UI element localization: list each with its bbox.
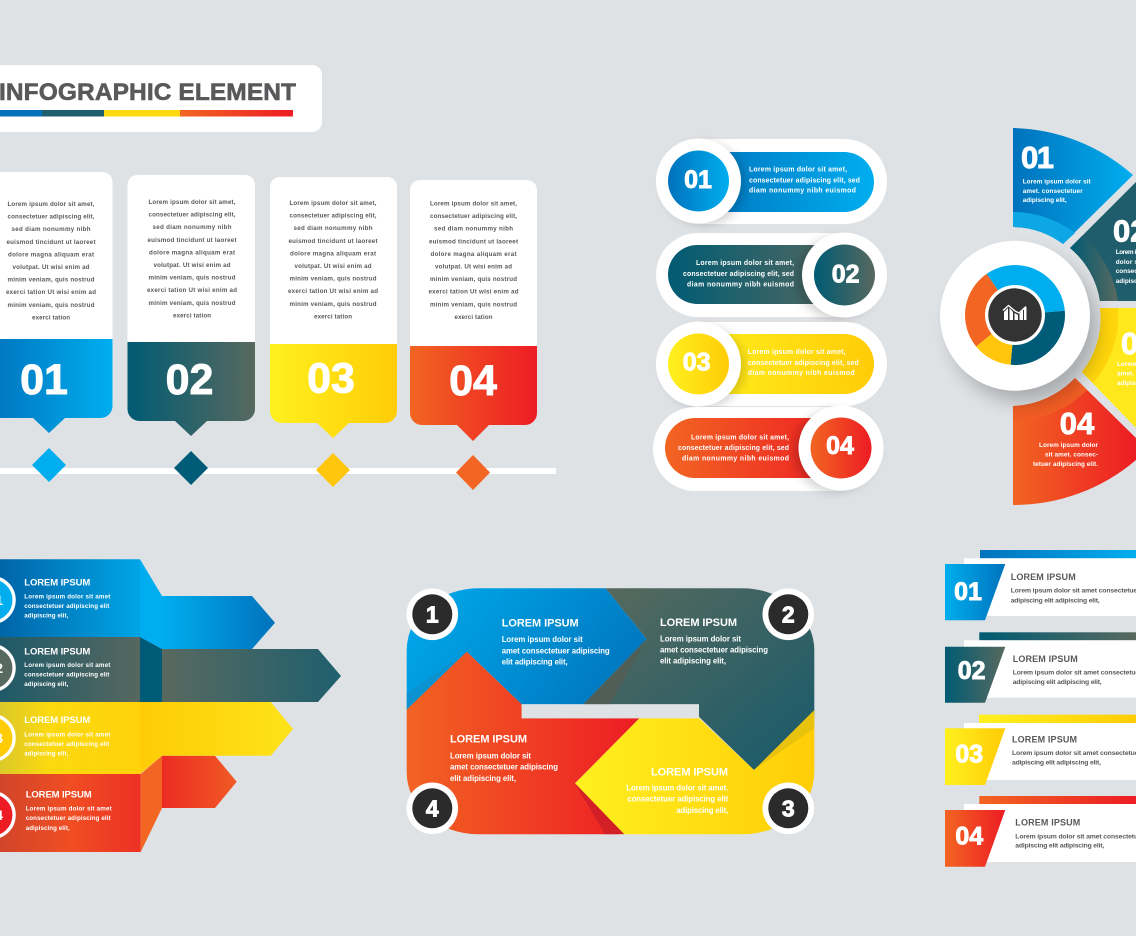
block text 4: elit adipiscing elit, xyxy=(450,774,516,783)
card 2 text: Lorem ipsum dolor sit amet, xyxy=(148,199,236,206)
block text 3 xyxy=(626,767,729,815)
tag row 3 xyxy=(945,715,1136,785)
arrow 2 text: Lorem ipsum dolor sit amet xyxy=(24,662,110,669)
pill 3 text xyxy=(748,349,859,377)
card 2 text: euismod tincidunt ut laoreet xyxy=(148,237,236,244)
arrow 2 badge xyxy=(0,646,14,690)
number badge 1: 1 xyxy=(426,601,439,627)
block text 3: LOREM IPSUM xyxy=(651,767,728,779)
card 2 text: dolore magna aliquam erat xyxy=(149,249,235,256)
card 3 text: minim veniam, quis nostrud xyxy=(290,301,377,308)
card 4 text: minim veniam, quis nostrud xyxy=(430,301,517,308)
blue block xyxy=(406,588,646,710)
card 2 text: exerci tation Ut wisi enim ad xyxy=(147,287,237,294)
card 4 xyxy=(410,180,537,490)
tag 3 text xyxy=(1012,734,1136,767)
pill 3 text: consectetuer adipiscing elit, sed xyxy=(748,360,859,367)
card 1 diamond xyxy=(32,448,66,482)
title color bar xyxy=(0,110,293,116)
arrow 1 text: Lorem ipsum dolor sit amet xyxy=(24,593,110,600)
card 2 text: minim veniam, quis nostrud xyxy=(148,275,236,282)
title card xyxy=(0,65,322,132)
arrow 1 badge xyxy=(0,578,14,622)
pill 3 text: Lorem ipsum dolor sit amet, xyxy=(748,349,846,356)
pill 2 text: Lorem ipsum dolor sit amet, xyxy=(696,260,794,267)
arrow 2 text: LOREM IPSUM xyxy=(24,646,90,657)
block text 1 xyxy=(502,618,610,666)
sector 04 text: Lorem ipsum dolor xyxy=(1039,442,1098,449)
pill 4 text: consectetuer adipiscing elit, sed xyxy=(678,445,789,452)
tag row 2 xyxy=(945,632,1136,703)
card 2 text: minim veniam, quis nostrud xyxy=(148,300,236,307)
sector 03 xyxy=(1082,308,1136,428)
arrow 4 xyxy=(0,756,237,852)
card 1 text: minim veniam, quis nostrud xyxy=(8,277,95,284)
panel: rounded four-part cycle xyxy=(400,580,820,840)
pill 1 text xyxy=(749,167,860,195)
arrow 4 text: consectetuer adipiscing elit xyxy=(26,815,111,822)
arrow 3 text: adipiscing elit, xyxy=(24,750,69,758)
card 2 text: volutpat. Ut wisi enim ad xyxy=(154,262,231,269)
pill 1 text: diam nonummy nibh euismod xyxy=(749,188,856,195)
pill 2 text: diam nonummy nibh euismod xyxy=(687,282,794,288)
card 3 text: volutpat. Ut wisi enim ad xyxy=(294,263,372,270)
tag 3 text: LOREM IPSUM xyxy=(1012,734,1077,744)
yellow block xyxy=(575,715,814,834)
block text 1: elit adipiscing elit, xyxy=(502,657,568,666)
card 2 number: 02 xyxy=(166,356,213,404)
tag 3 text: adipiscing elit adipiscing elit, xyxy=(1012,760,1101,767)
card 3 text: sed diam nonummy nibh xyxy=(294,225,373,232)
card 4 text xyxy=(428,200,519,321)
panel: timeline cards xyxy=(0,172,537,490)
block text 4 xyxy=(450,733,558,783)
arrow 4 badge xyxy=(0,792,14,838)
donut chart xyxy=(965,265,1065,365)
card 1 text: sed diam nonummy nibh xyxy=(12,226,91,233)
panel: tag list xyxy=(945,550,1136,867)
card 3 xyxy=(270,177,397,487)
arrow 1 text xyxy=(24,577,110,620)
card 2 text: sed diam nonummy nibh xyxy=(152,224,232,231)
arrow 3 text: Lorem ipsum dolor sit amet xyxy=(24,731,110,738)
card 3 text: dolore magna aliquam erat xyxy=(290,250,376,257)
arrow 2 text: consectetuer adipiscing elit xyxy=(24,672,109,678)
sector 02 xyxy=(1070,182,1136,301)
pill 4 number: 04 xyxy=(826,432,854,460)
sector 02 text xyxy=(1116,249,1136,285)
card 4 text: volutpat. Ut wisi enim ad xyxy=(435,264,512,270)
pill 1 number: 01 xyxy=(684,166,712,194)
card 1 text: minim veniam, quis nostrud xyxy=(8,302,95,309)
card 4 text: exerci tation xyxy=(454,314,493,321)
sector 04 xyxy=(1013,378,1136,505)
block text 2: elit adipiscing elit, xyxy=(660,657,726,666)
pill 3 number: 03 xyxy=(683,349,711,377)
arrow 2 text xyxy=(24,646,110,688)
tag 4 text: LOREM IPSUM xyxy=(1015,818,1080,828)
card 1 text: exerci tation Ut wisi enim ad xyxy=(6,289,96,296)
arrow 3 text: consectetuer adipiscing elit xyxy=(24,741,109,748)
card 3 text: euismod tincidunt ut laoreet xyxy=(288,238,378,245)
arrow 3 text xyxy=(24,715,110,758)
block text 2 xyxy=(660,617,768,666)
sector 01 xyxy=(1013,128,1133,244)
pill 2 xyxy=(656,232,887,319)
orange block xyxy=(400,652,639,840)
sector 04 number: 04 xyxy=(1060,406,1095,441)
pill 2 text: consectetuer adipiscing elit, sed xyxy=(683,271,794,278)
card 3 text: consectetuer adipiscing elit, xyxy=(290,213,377,220)
sector 01 text: amet. consectetuer xyxy=(1023,188,1083,195)
card 1 xyxy=(0,172,112,482)
tag 4 text: adipiscing elit adipiscing elit, xyxy=(1015,843,1104,850)
number badge 4: 4 xyxy=(426,795,439,821)
tag 1 text xyxy=(1011,572,1136,604)
hub white disc xyxy=(940,241,1090,391)
card 4 text: consectetuer adipiscing elit, xyxy=(430,213,517,220)
sector 04 text xyxy=(1033,442,1098,468)
card 3 text: exerci tation xyxy=(314,313,352,320)
pill 3 text: diam nonummy nibh euismod xyxy=(748,370,855,377)
card 2 text: exerci tation xyxy=(173,312,211,319)
card 3 text: minim veniam, quis nostrud xyxy=(290,276,377,283)
tag 1 text: Lorem ipsum dolor sit amet consectetuer xyxy=(1011,588,1136,595)
block text 1: Lorem ipsum dolor sit xyxy=(502,635,583,644)
card 3 diamond xyxy=(316,453,350,487)
pill 1 xyxy=(656,138,887,225)
tag 2 text: LOREM IPSUM xyxy=(1013,654,1078,664)
card 4 text: exerci tation Ut wisi enim ad xyxy=(428,289,519,296)
sector 01 text: Lorem ipsum dolor sit xyxy=(1023,178,1092,185)
arrow 1 text: adipiscing elit, xyxy=(24,612,69,620)
arrow 3 xyxy=(0,702,293,774)
tag 4 number: 04 xyxy=(955,823,983,851)
arrow 3 badge xyxy=(0,716,14,760)
card 4 text: sed diam nonummy nibh xyxy=(434,226,513,233)
card 1 text: euismod tincidunt ut laoreet xyxy=(6,239,96,246)
tag 1 number: 01 xyxy=(954,578,982,606)
sector 04 text: tetuer adipiscing elit. xyxy=(1033,461,1098,468)
card 2 diamond xyxy=(174,451,208,485)
sector 01 number: 01 xyxy=(1021,140,1054,175)
block text 4: LOREM IPSUM xyxy=(450,733,527,745)
tag 2 text xyxy=(1013,654,1136,686)
card 1 number: 01 xyxy=(20,356,68,404)
tag 3 number: 03 xyxy=(955,741,983,769)
panel: radial fan xyxy=(940,128,1136,505)
card 2 xyxy=(128,175,255,485)
arrow 4 text: adipiscing elit, xyxy=(26,825,70,832)
card 1 text: volutpat. Ut wisi enim ad xyxy=(12,264,90,271)
number badge 1 xyxy=(406,588,458,640)
tag 1 text: adipiscing elit adipiscing elit, xyxy=(1011,597,1100,604)
sector 03 text xyxy=(1117,361,1136,387)
block text 2: Lorem ipsum dolor sit xyxy=(660,634,741,643)
number badge 3: 3 xyxy=(782,795,795,821)
block text 2: amet consectetuer adipiscing xyxy=(660,646,768,655)
tag row 4 xyxy=(945,796,1136,867)
card 4 text: minim veniam, quis nostrud xyxy=(430,276,517,283)
card 3 text: Lorem ipsum dolor sit amet, xyxy=(290,200,377,207)
arrow 1 xyxy=(0,559,275,649)
pill 2 number: 02 xyxy=(832,261,860,289)
arrow 1 text: LOREM IPSUM xyxy=(24,577,90,588)
arrow 2 xyxy=(0,637,341,702)
block text 4: amet consectetuer adipiscing xyxy=(450,763,558,772)
number badge 4 xyxy=(406,782,458,834)
card 1 text: dolore magna aliquam erat xyxy=(8,251,94,258)
card 1 text: Lorem ipsum dolor sit amet, xyxy=(8,201,95,208)
arrow 4 text: LOREM IPSUM xyxy=(26,790,92,801)
tag 2 number: 02 xyxy=(958,657,986,685)
block text 1: LOREM IPSUM xyxy=(502,618,579,630)
sector 04 text: sit amet. consec- xyxy=(1045,452,1098,458)
block text 4: Lorem ipsum dolor sit xyxy=(450,751,531,760)
card 3 text xyxy=(288,200,378,320)
block text 3: Lorem ipsum dolor sit amet. xyxy=(626,783,728,792)
hub shadow xyxy=(950,254,1098,402)
pill 4 text xyxy=(678,434,789,462)
pill 1 text: consectetuer adipiscing elit, sed xyxy=(749,177,860,184)
block text 1: amet consectetuer adipiscing xyxy=(502,646,610,655)
arrow 4 text xyxy=(26,790,112,832)
cycle gap xyxy=(522,704,699,718)
card 4 text: Lorem ipsum dolor sit amet, xyxy=(430,200,517,208)
teal block xyxy=(583,580,820,770)
card 2 text xyxy=(147,199,237,319)
pill 3 xyxy=(656,322,887,408)
tag 2 text: adipiscing elit adipiscing elit, xyxy=(1013,679,1102,686)
card 2 text: consectetuer adipiscing elit, xyxy=(148,212,236,219)
panel: pill list xyxy=(653,138,887,492)
number badge 2 xyxy=(762,588,814,640)
tag 4 text xyxy=(1015,818,1136,850)
card 3 number: 03 xyxy=(307,355,355,403)
icon: chart xyxy=(1003,306,1026,320)
pill 2 text xyxy=(683,260,794,288)
card 1 text xyxy=(6,201,96,321)
timeline line xyxy=(0,468,556,474)
number badge 3 xyxy=(762,782,814,834)
arrow 4 text: Lorem ipsum dolor sit amet xyxy=(26,806,112,813)
card 1 text: consectetuer adipiscing elit, xyxy=(8,214,95,221)
arrow 1 text: consectetuer adipiscing elit xyxy=(24,603,109,610)
block text 3: consectetuer adipiscing elit xyxy=(627,795,729,804)
block text 2: LOREM IPSUM xyxy=(660,617,737,629)
block text 3: adipiscing elit, xyxy=(676,806,728,815)
pill 4 xyxy=(653,406,884,492)
arrow 3 text: LOREM IPSUM xyxy=(24,715,90,726)
card 4 text: euismod tincidunt ut laoreet xyxy=(429,238,518,245)
card 4 diamond xyxy=(456,455,490,490)
card 4 number: 04 xyxy=(449,357,497,405)
sector 01 text xyxy=(1023,178,1092,204)
tag 1 text: LOREM IPSUM xyxy=(1011,572,1076,582)
pill 4 text: Lorem ipsum dolor sit amet, xyxy=(691,434,789,442)
card 1 text: exerci tation xyxy=(32,314,70,321)
card 4 text: dolore magna aliquam erat xyxy=(430,251,516,258)
tag row 1 xyxy=(945,550,1136,620)
sector 01 text: adipiscing elit, xyxy=(1023,197,1067,204)
panel: arrows xyxy=(0,559,341,852)
pill 4 text: diam nonummy nibh euismod xyxy=(682,456,789,462)
card 3 text: exerci tation Ut wisi enim ad xyxy=(288,288,378,295)
pill 1 text: Lorem ipsum dolor sit amet, xyxy=(749,167,847,174)
cycle shapes xyxy=(400,580,820,840)
arrow 2 text: adipiscing elit, xyxy=(24,681,69,688)
title: INFOGRAPHIC ELEMENT xyxy=(0,79,296,106)
number badge 2: 2 xyxy=(782,601,795,627)
